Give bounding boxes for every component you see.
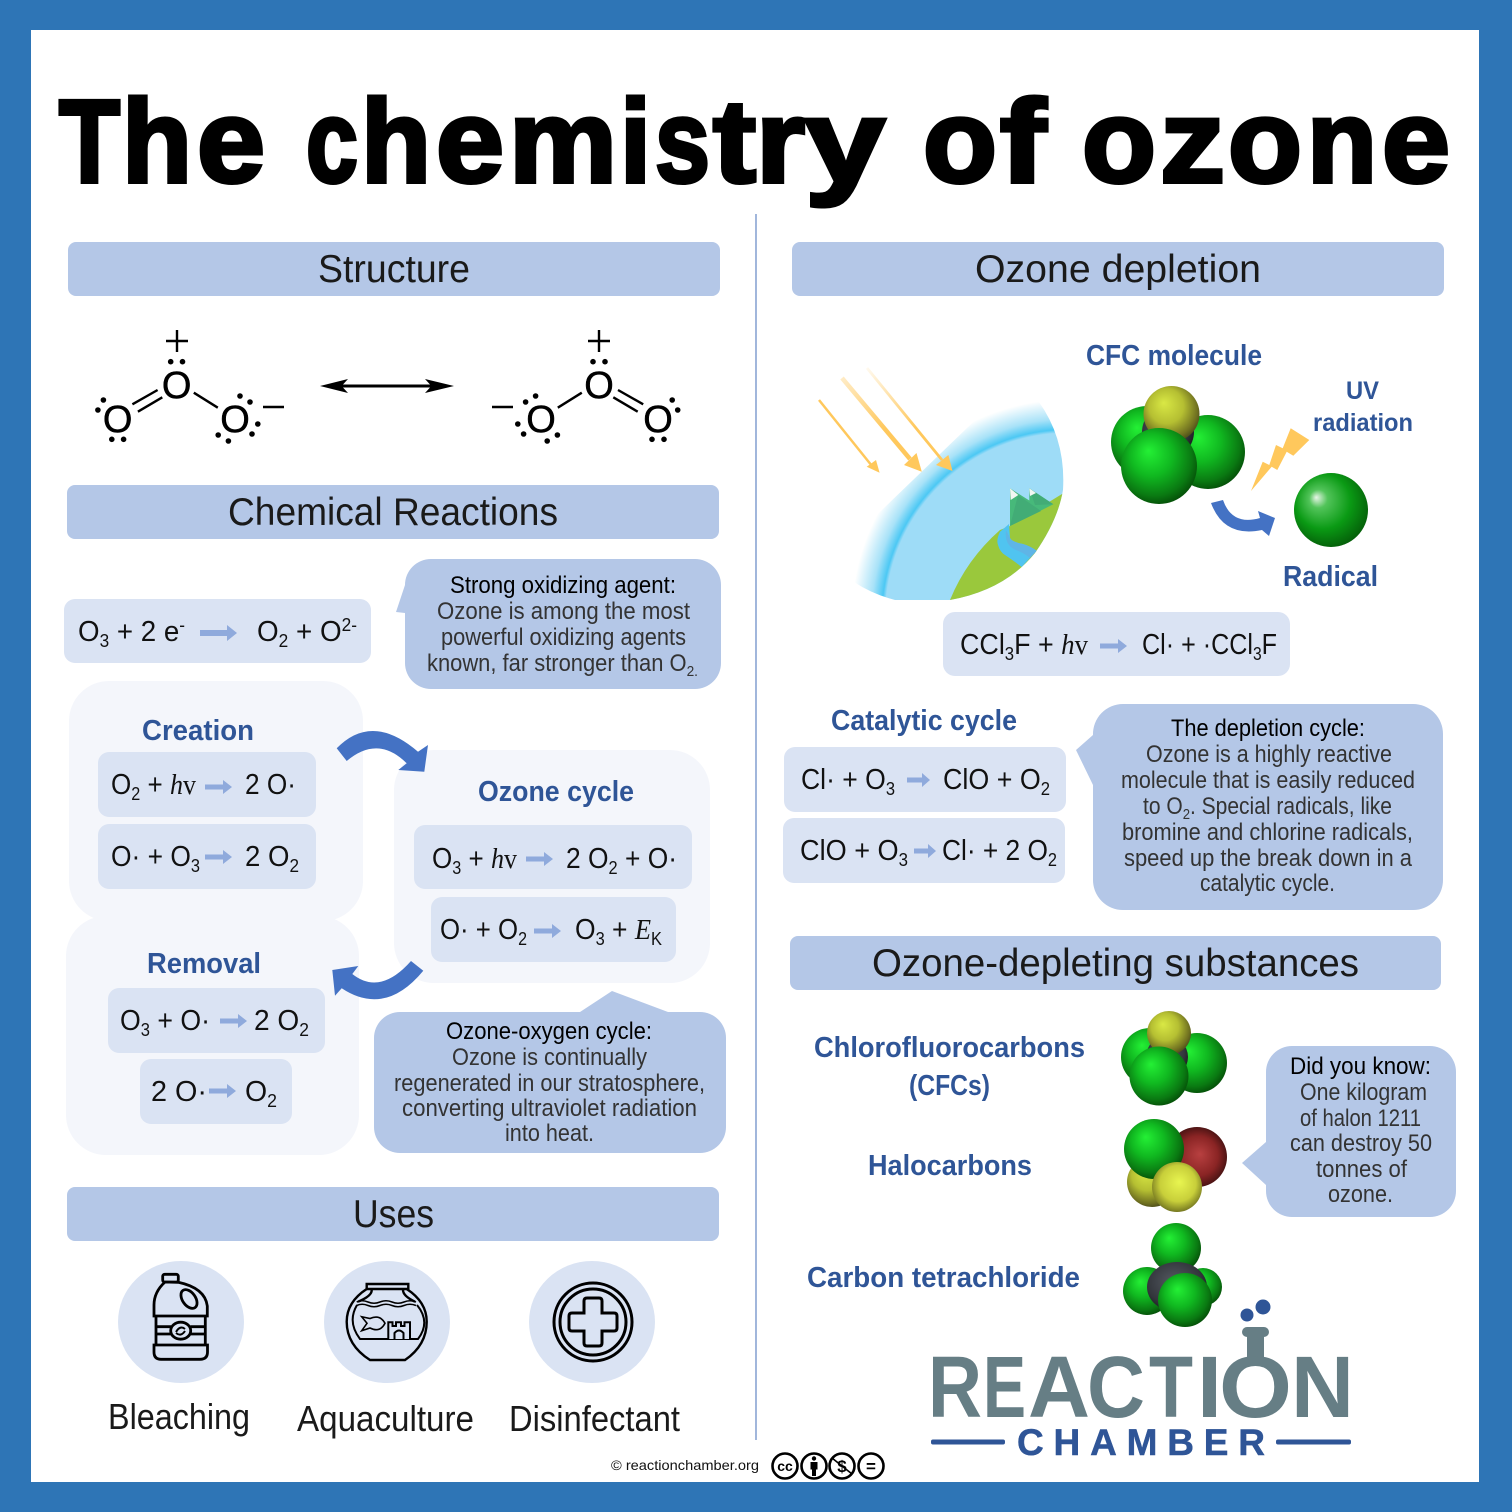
- callout: ozone-oxygen cycle: into heat.: [505, 1120, 594, 1147]
- equation: removal 1: [108, 988, 325, 1053]
- equation: catalytic 2: Cl· + 2 O: [942, 835, 1059, 867]
- equation: oxidizing: + 2 e: [109, 616, 179, 648]
- label: aquaculture: Aquaculture: [297, 1398, 474, 1439]
- label: uv radiation: UV: [1346, 377, 1379, 405]
- equation: ozone cycle 2: O: [575, 914, 598, 946]
- label: cfc molecule: CFC molecule: [1086, 340, 1262, 372]
- equation: oxidizing: 3: [100, 631, 109, 651]
- heading: ozone depletion: Ozone depletion: [975, 248, 1261, 291]
- equation: catalytic 1: ClO + O: [943, 764, 1049, 796]
- callout: depletion cycle: [1076, 704, 1443, 910]
- logo: reaction chamber: N: [1291, 1339, 1354, 1436]
- title: s: [655, 76, 710, 208]
- equation: removal 2: [140, 1059, 292, 1124]
- callout: did you know: tonnes of: [1316, 1156, 1407, 1183]
- panel: chemical reactions: [64, 485, 726, 1155]
- heading: chemical reactions: Chemical Reactions: [228, 491, 558, 534]
- equation: cfc dissociation: 3: [1005, 644, 1014, 664]
- label: carbon tetrachloride: Carbon tetrachloride: [807, 1262, 1080, 1294]
- equation: oxidizing: -: [179, 615, 185, 635]
- equation: cfc dissociation: Cl· + ·CCl: [1142, 629, 1270, 661]
- callout: did you know: [1242, 1046, 1456, 1217]
- callout: depletion cycle: bromine and chlorine radicals,: [1122, 819, 1413, 846]
- callout: depletion cycle: . Special radicals, like: [1190, 793, 1392, 820]
- equation: ozone cycle 2: 2: [518, 929, 527, 949]
- icon: creative commons licence: =: [866, 1457, 876, 1476]
- heading: ozone cycle: Ozone cycle: [478, 776, 634, 808]
- logo: reaction chamber: C: [1087, 1339, 1145, 1436]
- illustration: cfc molecule: [1111, 386, 1245, 504]
- equation: ozone cycle 2: O· + O: [440, 914, 528, 946]
- callout: did you know: One kilogram: [1300, 1079, 1427, 1106]
- title: h: [122, 76, 192, 208]
- ozone resonance structure right: O: [584, 365, 614, 407]
- heading: structure: Structure: [318, 248, 470, 291]
- callout: depletion cycle: catalytic cycle.: [1200, 870, 1335, 897]
- title: t: [713, 76, 756, 208]
- equation: ozone cycle 1: O: [432, 843, 455, 875]
- equation: cfc dissociation: F: [1262, 629, 1277, 661]
- heading: removal: Removal: [147, 948, 261, 980]
- callout: did you know: can destroy 50: [1290, 1130, 1432, 1157]
- panel: removal: [66, 916, 359, 1155]
- equation: ozone cycle 2: [431, 897, 676, 962]
- equation: catalytic 2: 3: [899, 850, 908, 870]
- panel: uses: [67, 1187, 719, 1439]
- arrow: dissociation: [1211, 500, 1275, 536]
- ozone resonance structure left: O: [162, 365, 191, 407]
- title: i: [620, 76, 651, 208]
- equation: cfc dissociation: hv: [1061, 629, 1089, 661]
- title: e: [197, 76, 265, 208]
- icon: lightning bolt: [1251, 428, 1309, 491]
- heading: creation: Creation: [142, 715, 254, 747]
- callout: did you know: of halon 1211: [1300, 1105, 1421, 1132]
- equation: creation 1: hv: [170, 769, 197, 801]
- illustration: cfc space-filling model: [1121, 1011, 1227, 1106]
- equation: ozone cycle 2: 3: [596, 929, 605, 949]
- label: uv radiation: radiation: [1313, 409, 1413, 437]
- label: chlorofluorocarbons: (CFCs): [909, 1070, 990, 1102]
- title: r: [756, 76, 805, 208]
- equation: ozone cycle 1: 2 O: [566, 843, 613, 875]
- equation: ozone cycle 2: +: [605, 914, 635, 946]
- equation: catalytic 1: 2: [1041, 779, 1050, 799]
- equation: creation 2: 2 O: [245, 841, 292, 873]
- callout: ozone-oxygen cycle: regenerated in our stratosphere,: [394, 1070, 705, 1097]
- title: T: [59, 76, 120, 208]
- equation: removal 1: + O·: [150, 1005, 210, 1037]
- logo: reaction chamber: E: [983, 1339, 1026, 1436]
- callout: ozone-oxygen cycle: [374, 991, 726, 1153]
- equation: ozone cycle 2: E: [634, 914, 651, 946]
- illustration: earth and atmosphere: [819, 368, 1080, 610]
- equation: ozone cycle 1: +: [461, 843, 491, 875]
- title: o: [1228, 76, 1302, 208]
- panel: ozone-depleting substances: [790, 936, 1456, 1327]
- equation: removal 2: O: [245, 1076, 268, 1108]
- title: y: [805, 76, 885, 208]
- equation: removal 1: O: [120, 1005, 143, 1037]
- arrow: creation to ozone cycle: [337, 731, 428, 772]
- callout: depletion cycle: speed up the break down in a: [1124, 845, 1413, 872]
- logo: reaction chamber: T: [1149, 1339, 1193, 1436]
- ozone resonance structure left: O: [220, 399, 250, 441]
- callout: depletion cycle: The depletion cycle:: [1171, 715, 1365, 742]
- equation: removal 1: 2: [299, 1020, 309, 1040]
- callout: depletion cycle: molecule that is easily reduced: [1121, 767, 1415, 794]
- title: o: [923, 76, 997, 208]
- equation: oxidizing: O: [257, 616, 280, 648]
- equation: oxidizing: O: [78, 616, 101, 648]
- equation: oxidizing: 2: [279, 631, 288, 651]
- equation: creation 1: O: [111, 769, 134, 801]
- icon: medical cross: [529, 1261, 655, 1383]
- callout: ozone-oxygen cycle: converting ultraviolet radiation: [402, 1095, 697, 1122]
- equation: ozone cycle 1: hv: [491, 843, 518, 875]
- arrows: sun rays: [819, 368, 952, 473]
- logo: reaction chamber: I: [1197, 1339, 1222, 1436]
- logo: reaction chamber: CHAMBER: [1017, 1422, 1265, 1463]
- callout: strong oxidizing agent: Ozone is among the most: [437, 598, 690, 625]
- ozone resonance structure left: O: [103, 399, 132, 441]
- equation: catalytic 2: [783, 818, 1065, 883]
- equation: creation 1: 2: [131, 784, 140, 804]
- illustration: radical atom: [1294, 473, 1368, 547]
- equation: creation 1: 2 O·: [245, 769, 296, 801]
- logo: reaction chamber: O: [1219, 1339, 1292, 1436]
- label: uv radiation: [1313, 377, 1413, 437]
- panel: structure: [68, 242, 720, 444]
- heading: ozone-depleting substances: Ozone-depleting substances: [872, 942, 1359, 985]
- equation: cfc dissociation: F +: [1014, 629, 1061, 661]
- equation: removal 1: 3: [141, 1020, 150, 1040]
- equation: cfc dissociation: [943, 612, 1290, 676]
- callout: depletion cycle: 2: [1183, 806, 1190, 823]
- title: e: [436, 76, 504, 208]
- equation: oxidizing: [64, 599, 371, 663]
- heading: ozone depletion: [792, 242, 1444, 296]
- heading: catalytic cycle: Catalytic cycle: [831, 705, 1017, 737]
- callout: depletion cycle: Ozone is a highly reactive: [1146, 741, 1392, 768]
- callout: depletion cycle: to O: [1143, 793, 1188, 820]
- ozone resonance structure left: [95, 330, 284, 444]
- callout: strong oxidizing agent: Strong oxidizing agent:: [450, 572, 676, 599]
- equation: creation 2: 2: [289, 856, 299, 876]
- resonance arrow: [320, 379, 454, 393]
- equation: oxidizing: 2-: [342, 615, 357, 635]
- equation: creation 1: +: [140, 769, 170, 801]
- panel: ozone depletion: [783, 242, 1444, 910]
- callout: ozone-oxygen cycle: Ozone is continually: [452, 1044, 647, 1071]
- label: chlorofluorocarbons: Chlorofluorocarbons: [814, 1032, 1085, 1064]
- equation: creation 2: [98, 824, 316, 889]
- equation: catalytic 1: [784, 747, 1066, 812]
- logo: reaction chamber: R: [928, 1339, 982, 1436]
- label: disinfectant: Disinfectant: [509, 1398, 680, 1439]
- equation: removal 2: 2 O·: [151, 1076, 207, 1108]
- equation: removal 2: 2: [267, 1091, 277, 1111]
- ozone resonance structure right: O: [526, 399, 556, 441]
- logo: reaction chamber: A: [1028, 1339, 1090, 1436]
- logo: reaction chamber: [928, 1300, 1354, 1463]
- heading: ozone-depleting substances: [790, 936, 1441, 990]
- title: c: [306, 76, 358, 208]
- title: e: [1382, 76, 1450, 208]
- label: radical: Radical: [1283, 561, 1378, 593]
- icon: bleach bottle: [118, 1261, 244, 1383]
- label: bleaching: Bleaching: [108, 1396, 250, 1437]
- callout: strong oxidizing agent: powerful oxidizing agents: [441, 624, 686, 651]
- equation: ozone cycle 1: 2: [609, 858, 618, 878]
- callout: did you know: ozone.: [1328, 1181, 1393, 1208]
- label: halocarbons: Halocarbons: [868, 1150, 1032, 1182]
- title: f: [1000, 76, 1047, 208]
- title: m: [509, 76, 617, 208]
- title: o: [1082, 76, 1156, 208]
- heading: structure: [68, 242, 720, 296]
- title: z: [1160, 76, 1225, 208]
- equation: ozone cycle 1: [414, 825, 692, 889]
- equation: removal 1: 2 O: [254, 1005, 301, 1037]
- label: chlorofluorocarbons: [814, 1032, 1085, 1102]
- equation: creation 1: [98, 752, 316, 817]
- equation: catalytic 1: Cl· + O: [801, 764, 894, 796]
- equation: catalytic 2: ClO + O: [800, 835, 906, 867]
- heading: uses: [67, 1187, 719, 1241]
- illustration: halocarbon space-filling model: [1124, 1119, 1227, 1212]
- callout: strong oxidizing agent: known, far stronger than O: [427, 650, 711, 677]
- equation: catalytic 2: 2: [1048, 850, 1057, 870]
- copyright: © reactionchamber.org: [611, 1457, 759, 1473]
- icon: creative commons licence: [772, 1454, 884, 1478]
- equation: cfc dissociation: 3: [1253, 644, 1262, 664]
- ozone resonance structure right: O: [643, 399, 673, 441]
- equation: cfc dissociation: CCl: [960, 629, 1008, 661]
- callout: strong oxidizing agent: [396, 559, 721, 689]
- callout: ozone-oxygen cycle: Ozone-oxygen cycle:: [446, 1018, 652, 1045]
- equation: catalytic 1: 3: [886, 779, 895, 799]
- equation: creation 2: O· + O: [111, 841, 199, 873]
- callout: did you know: Did you know:: [1290, 1053, 1431, 1080]
- icon: creative commons licence: cc: [777, 1458, 793, 1474]
- panel: ozone cycle: [394, 750, 710, 983]
- callout: strong oxidizing agent: 2.: [687, 663, 698, 680]
- arrow: ozone cycle to removal: [332, 961, 423, 999]
- equation: ozone cycle 1: 3: [452, 858, 461, 878]
- equation: creation 2: 3: [191, 856, 200, 876]
- equation: ozone cycle 2: K: [651, 929, 662, 949]
- title: n: [1307, 76, 1377, 208]
- heading: chemical reactions: [67, 485, 719, 539]
- equation: oxidizing: + O: [288, 616, 342, 648]
- icon: fishbowl: [324, 1261, 450, 1383]
- panel: creation: [69, 681, 363, 921]
- ozone resonance structure right: [492, 330, 680, 444]
- illustration: carbon tetrachloride space-filling model: [1123, 1223, 1222, 1327]
- icon: creative commons licence: $: [837, 1457, 847, 1476]
- heading: uses: Uses: [353, 1193, 434, 1236]
- title: h: [361, 76, 431, 208]
- equation: ozone cycle 1: + O·: [618, 843, 677, 875]
